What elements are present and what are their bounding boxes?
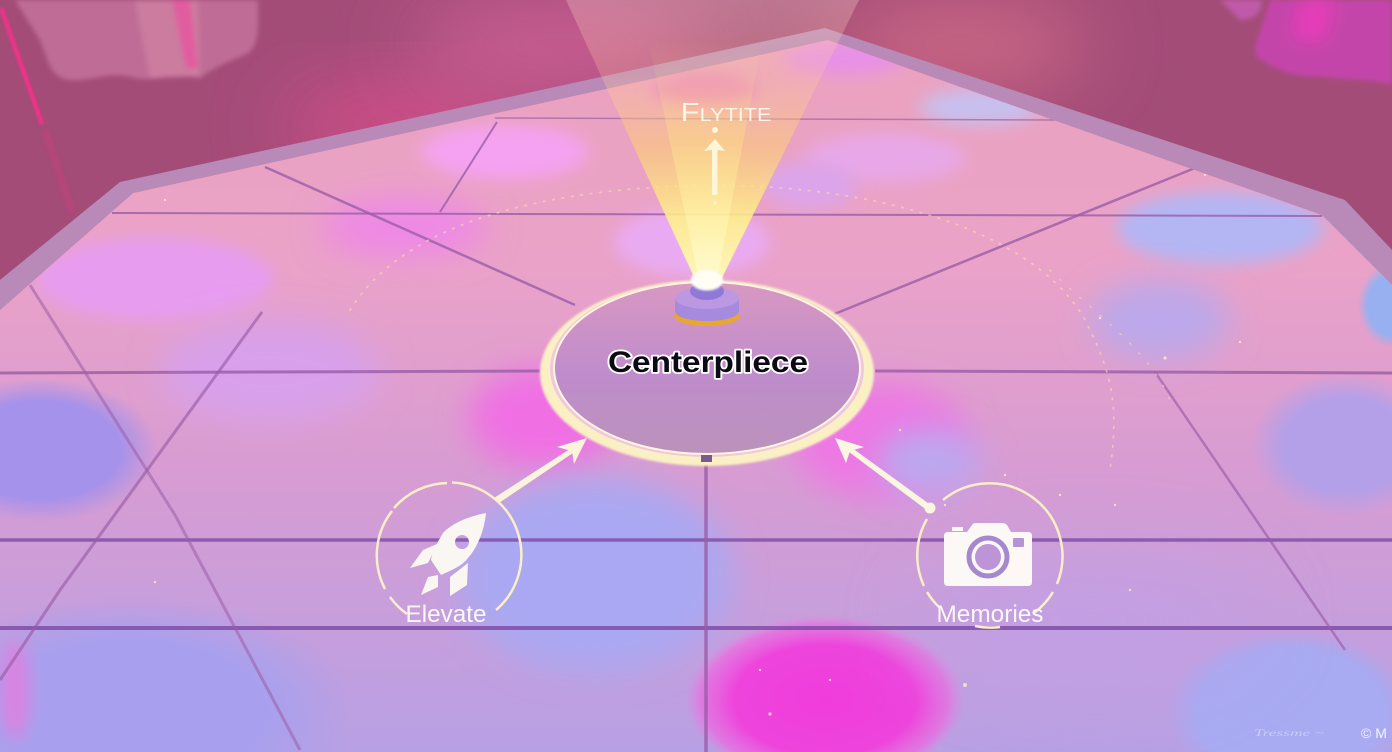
memories label: Memories — [936, 601, 1044, 628]
pedestal lamp — [674, 270, 740, 326]
centerpiece platform — [540, 280, 874, 466]
copyright: © M — [1361, 725, 1387, 741]
memories node — [917, 483, 1062, 628]
flytite label: Flytite — [680, 97, 772, 127]
elevate label: Elevate — [406, 601, 486, 628]
right draped table — [1220, 0, 1392, 84]
platform disc — [554, 282, 860, 454]
arrow: memories to centerpiece — [835, 438, 936, 514]
icon: rocket — [410, 513, 486, 596]
arrow: flytite up — [704, 127, 725, 205]
centerpiece label: Centerpliece — [608, 346, 808, 379]
light beam — [566, 0, 859, 290]
platform outer glowing ring — [540, 280, 874, 466]
elevate node — [377, 482, 521, 628]
left draped table — [15, 0, 258, 80]
signature: Tressme ~ — [1254, 728, 1324, 738]
elevate ring — [377, 482, 521, 614]
memories ring — [917, 483, 1062, 628]
dotted sparkle ring — [350, 185, 1170, 470]
arrow: elevate to centerpiece — [494, 438, 587, 503]
pink light post — [1, 8, 72, 212]
icon: camera — [944, 523, 1032, 586]
sparkles — [154, 174, 1241, 716]
dance floor rim — [0, 28, 1392, 310]
